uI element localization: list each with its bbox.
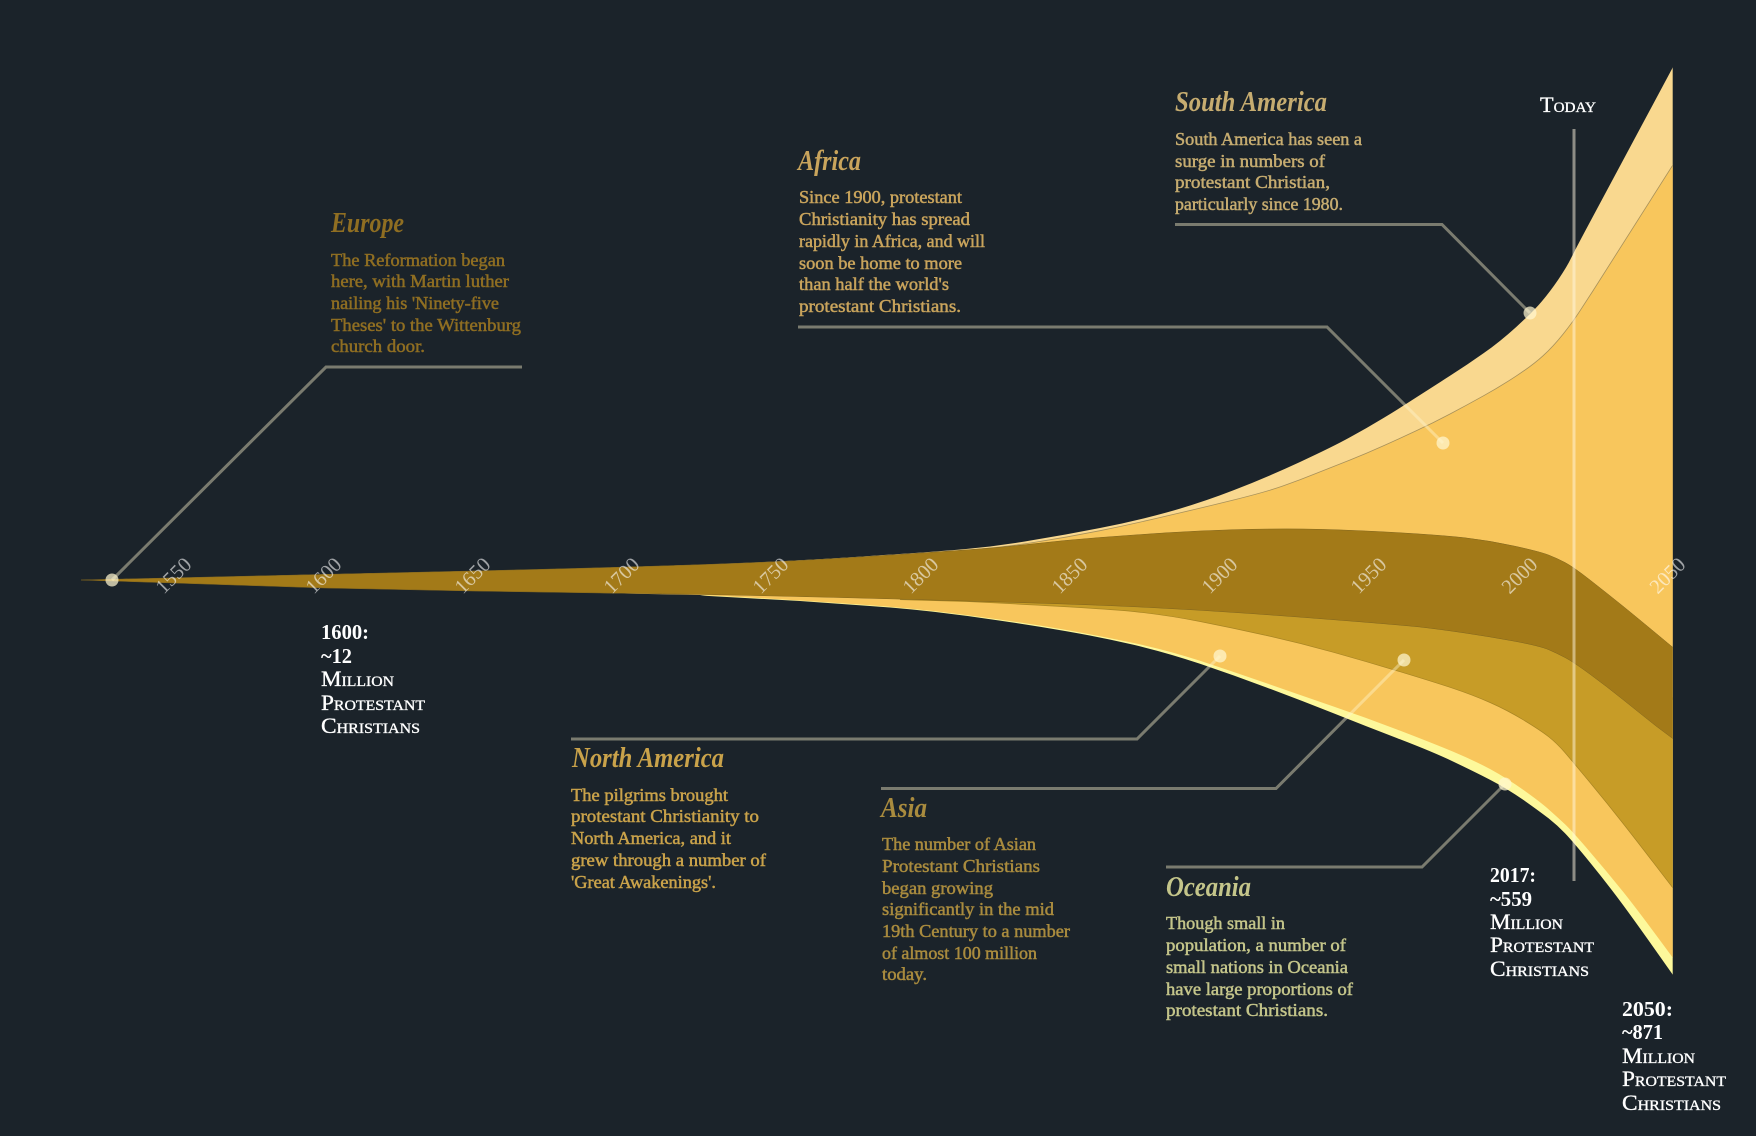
callout: 2017 total: 2017: [1490, 863, 1536, 887]
heading: Europe: Europe [330, 207, 404, 239]
time axis year labels [152, 554, 1690, 598]
time axis year labels: 1850 [1048, 554, 1092, 598]
time axis year labels: 1950 [1347, 554, 1391, 598]
panel: North America [571, 742, 766, 892]
band: South America [81, 67, 1673, 700]
leader: Europe [106, 367, 522, 586]
panel: Africa [796, 145, 985, 316]
callout: 2017 total: Protestant [1490, 932, 1594, 957]
text: North America description: grew through a number of [571, 850, 766, 870]
text: Oceania description: protestant Christians. [1166, 1000, 1328, 1020]
text: Europe description: The Reformation began [331, 250, 505, 270]
text: South America description: South America has seen a [1175, 129, 1362, 149]
leader: Oceania [1166, 778, 1512, 867]
leader: Africa [798, 327, 1450, 450]
text: Oceania description: small nations in Oceania [1166, 957, 1348, 977]
callout: 2017 total: Christians [1490, 956, 1589, 981]
text: North America description: protestant Christianity to [571, 806, 759, 826]
text: North America description: North America, and it [571, 828, 731, 848]
panel: South America [1175, 86, 1362, 214]
callout: 2017 total [1490, 863, 1594, 981]
callout: 1600 total: Million [321, 666, 394, 691]
text: Asia description: 19th Century to a number [882, 921, 1070, 941]
text: South America description: protestant Christian, [1175, 172, 1330, 192]
heading: South America: South America [1175, 86, 1327, 118]
text: Africa description: protestant Christians. [799, 296, 961, 316]
text: Asia description: The number of Asian [882, 834, 1036, 854]
callout: 2017 total: ~559 [1490, 887, 1532, 911]
time axis year labels: 1750 [749, 554, 793, 598]
panel: Asia [879, 792, 1070, 984]
heading: Africa: Africa [796, 145, 861, 177]
time axis year labels: 1650 [451, 554, 495, 598]
band: Africa [971, 164, 1673, 698]
band: Oceania [700, 570, 1673, 975]
text: Asia description: of almost 100 million [882, 943, 1037, 963]
callout: 2050 total: ~871 [1622, 1020, 1663, 1044]
text: Europe description: here, with Martin luther [331, 271, 509, 291]
text: Asia description: today. [882, 964, 927, 984]
time axis year labels: 1700 [600, 554, 644, 598]
text: Africa description: Christianity has spread [799, 209, 970, 229]
callout: 2050 total: Million [1622, 1043, 1695, 1068]
leader: North America [571, 650, 1226, 739]
time axis year labels: 1800 [899, 554, 943, 598]
time axis year labels: 2050 [1646, 554, 1690, 598]
text: North America description [571, 785, 766, 892]
text: Asia description: Protestant Christians [882, 856, 1040, 876]
text: Europe description: Theses' to the Wittenburg [331, 315, 521, 335]
callout: 2017 total: Million [1490, 909, 1563, 934]
text: Europe description: church door. [331, 336, 425, 356]
callout: 1600 total: 1600: [321, 620, 369, 644]
text: North America description: The pilgrims brought [571, 785, 728, 805]
text: Africa description: rapidly in Africa, and will [799, 231, 985, 251]
callout: 2050 total [1622, 997, 1726, 1115]
panel: Europe [330, 207, 521, 356]
text: Africa description: Since 1900, protestant [799, 187, 962, 207]
text: South America description [1175, 129, 1362, 214]
callout: 2050 total: 2050: [1622, 997, 1673, 1021]
callout: 1600 total [321, 620, 425, 738]
callout: 1600 total: ~12 [321, 644, 352, 668]
text: Oceania description: have large proportions of [1166, 979, 1353, 999]
text: South America description: surge in numbers of [1175, 151, 1325, 171]
callout: 1600 total: Protestant [321, 690, 425, 715]
heading: Oceania: Oceania [1166, 871, 1251, 903]
text: Africa description [799, 187, 985, 316]
heading: Asia: Asia [879, 792, 927, 824]
text: North America description: 'Great Awakenings'. [571, 872, 716, 892]
leader: South America [1175, 224, 1536, 320]
text: Oceania description [1166, 913, 1353, 1020]
callout: 2050 total: Christians [1622, 1090, 1721, 1115]
time axis year labels: 2000 [1498, 554, 1542, 598]
callout: 2050 total: Protestant [1622, 1066, 1726, 1091]
text: Asia description [882, 834, 1070, 984]
time axis year labels: 1900 [1198, 554, 1242, 598]
text: Africa description: than half the world's [799, 274, 949, 294]
text: Africa description: soon be home to more [799, 253, 962, 273]
today label: Today [1540, 92, 1596, 117]
text: Oceania description: population, a number of [1166, 935, 1346, 955]
panel: Oceania [1166, 871, 1353, 1020]
today marker line [1572, 129, 1576, 881]
heading: North America: North America [571, 742, 724, 774]
band: Asia [900, 600, 1673, 888]
band: Europe [81, 529, 1676, 741]
text: Europe description: nailing his 'Ninety-five [331, 293, 499, 313]
text: Europe description [331, 250, 521, 356]
stream chart [81, 67, 1676, 975]
time axis year labels: 1550 [152, 554, 196, 598]
text: Asia description: began growing [882, 878, 993, 898]
text: Asia description: significantly in the mid [882, 899, 1054, 919]
time axis year labels: 1600 [302, 554, 346, 598]
leader: Asia [881, 654, 1410, 788]
callout: 1600 total: Christians [321, 713, 420, 738]
text: Oceania description: Though small in [1166, 913, 1285, 933]
text: South America description: particularly since 1980. [1175, 194, 1343, 214]
band: North America [600, 570, 1673, 958]
